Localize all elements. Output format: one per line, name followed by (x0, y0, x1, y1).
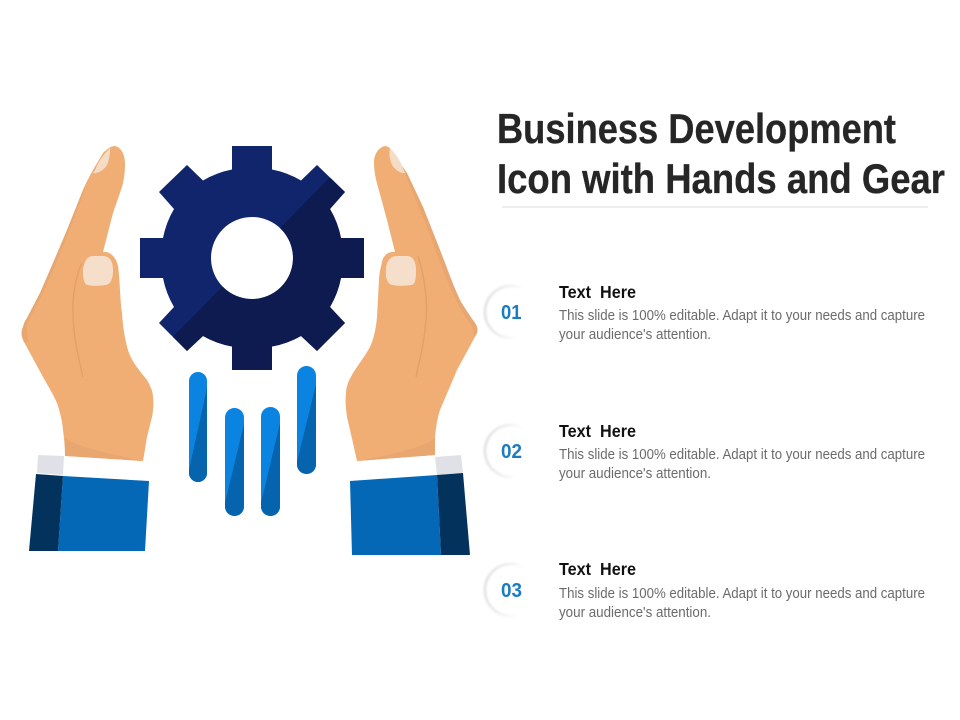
body text 03: your audience's attention. (559, 605, 711, 621)
badge 02 (485, 425, 537, 477)
list item 03 (485, 559, 925, 621)
icon: right hand (346, 146, 477, 461)
body text 02 (559, 447, 925, 482)
body text 02: This slide is 100% editable. Adapt it to your needs and capture (559, 447, 925, 463)
badge 01 (485, 286, 537, 338)
body text 01: your audience's attention. (559, 327, 711, 343)
heading 01: Text Here (559, 282, 636, 302)
illustration: hands protecting gear (22, 146, 477, 555)
heading 02: Text Here (559, 421, 636, 441)
heading 03: Text Here (559, 559, 636, 579)
body text 01 (559, 308, 925, 343)
icon: left sleeve (29, 474, 149, 551)
body text 01: This slide is 100% editable. Adapt it to your needs and capture (559, 308, 925, 324)
title: Business Development (497, 105, 896, 152)
icon: right sleeve (350, 473, 470, 555)
list item 02 (485, 421, 925, 482)
icon: right shirt cuff (350, 455, 463, 481)
title (497, 105, 945, 202)
badge 01: 01 (501, 302, 522, 324)
body text 03: This slide is 100% editable. Adapt it to your needs and capture (559, 586, 925, 602)
badge 03 (485, 564, 537, 616)
body text 03 (559, 586, 925, 621)
icon: left shirt cuff (37, 455, 149, 481)
badge 03: 03 (501, 580, 522, 602)
list item 01 (485, 282, 925, 343)
icon: left hand (22, 146, 153, 461)
icon: gear (140, 146, 364, 370)
body text 02: your audience's attention. (559, 466, 711, 482)
badge 02: 02 (501, 441, 522, 463)
chart: four blue bars (189, 366, 316, 516)
